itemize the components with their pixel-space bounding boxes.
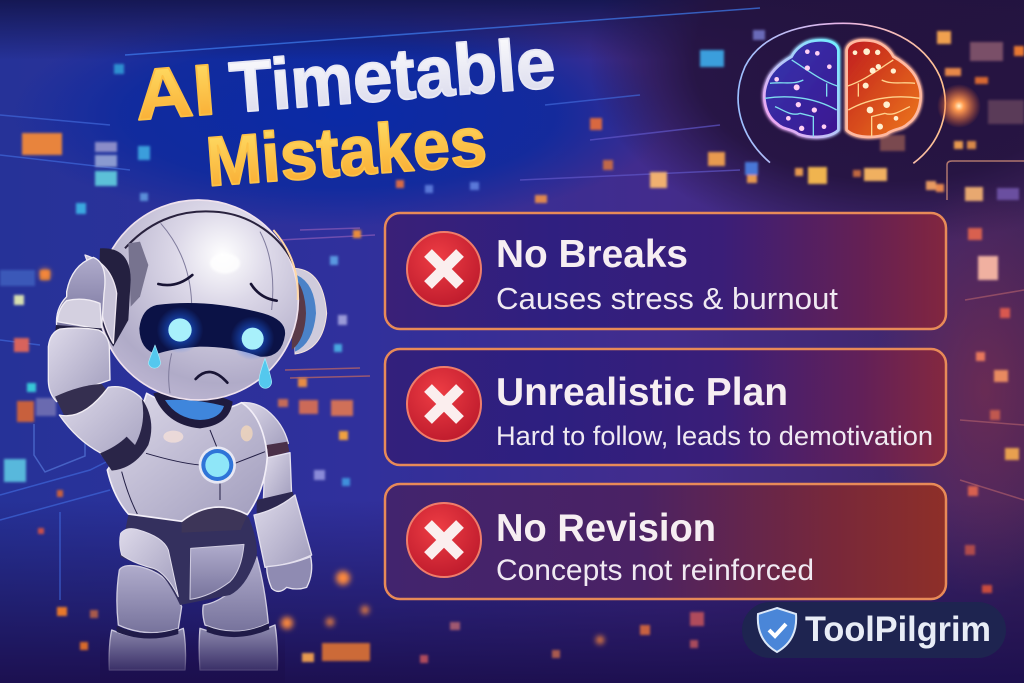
orange bokeh glows <box>40 269 604 644</box>
robot chest light <box>199 446 236 484</box>
icon: red x <box>407 503 481 577</box>
robot neck <box>153 390 233 428</box>
brain icon with arc <box>738 23 945 163</box>
right hemisphere <box>847 40 921 137</box>
panel: no revision <box>385 484 946 599</box>
icon: shield check <box>758 608 796 652</box>
robot character <box>48 200 327 670</box>
robot head <box>85 200 298 400</box>
panel: no breaks <box>385 213 946 329</box>
robot pelvis <box>120 507 257 605</box>
spark glow <box>937 84 981 128</box>
robot foot fade <box>100 630 285 683</box>
text: hard to follow: Hard to follow, leads to demotivation <box>496 421 933 451</box>
heading: unrealistic plan: Unrealistic Plan <box>496 371 788 414</box>
icon: red x <box>407 367 481 441</box>
heading: no breaks: No Breaks <box>496 233 688 276</box>
robot legs <box>109 557 278 670</box>
robot left ear <box>98 248 131 347</box>
text: concepts not reinforced: Concepts not reinforced <box>496 554 814 587</box>
panel: unrealistic plan <box>385 349 946 465</box>
logo badge <box>742 602 1006 658</box>
title <box>132 23 558 201</box>
robot visor <box>139 303 285 357</box>
title line one: Timetable <box>227 23 558 128</box>
icon: red x <box>407 232 481 306</box>
heading: no revision: No Revision <box>496 507 716 550</box>
robot torso <box>107 393 267 521</box>
robot tears <box>148 345 272 388</box>
robot raised arm <box>48 257 151 471</box>
title line one: AI <box>132 50 218 136</box>
robot eyes <box>168 318 264 350</box>
robot right ear <box>292 268 327 354</box>
left hemisphere <box>764 40 838 137</box>
title line two: Mistakes <box>203 102 489 201</box>
logo wordmark: ToolPilgrim <box>805 610 991 649</box>
text: causes stress: Causes stress & burnout <box>496 281 838 316</box>
robot brows and mouth <box>158 275 277 383</box>
robot right arm <box>242 403 312 591</box>
